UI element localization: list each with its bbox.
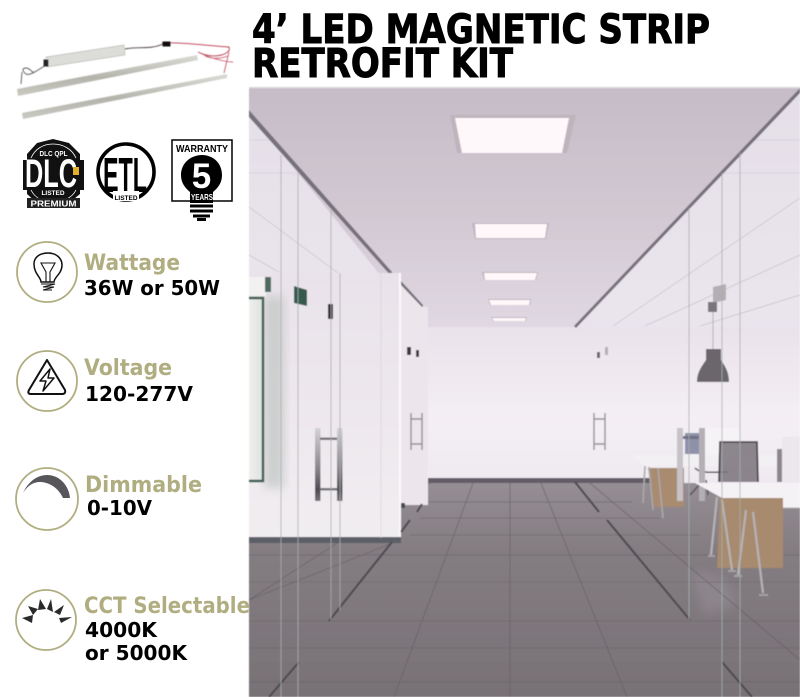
LED strip 1 (17, 55, 198, 96)
photo: ceiling (249, 88, 800, 327)
badge: DLC QPL listed premium: DLC QPL (40, 151, 68, 158)
driver box (46, 45, 125, 67)
photo: office chair (719, 442, 758, 482)
photo: small door handles (411, 413, 605, 450)
photo: second wall segment (401, 285, 428, 508)
title (252, 7, 710, 87)
photo: ceiling beams (249, 88, 800, 328)
badge: DLC QPL listed premium: LISTED (41, 190, 65, 197)
spec: dimmable (16, 468, 202, 530)
badge: ETL listed (98, 144, 154, 203)
badge: 5 year warranty: YEARS (191, 192, 213, 202)
photo: floor rails (269, 482, 752, 697)
badge: ETL listed: LISTED (114, 195, 138, 202)
icon: voltage triangle (17, 351, 77, 411)
office corridor photo (249, 87, 800, 697)
badge: 5 year warranty: 5 (192, 157, 211, 196)
photo: ceiling light panels (450, 115, 576, 321)
label: CCT selectable: CCT Selectable (84, 594, 250, 619)
title: RETROFIT KIT (252, 41, 514, 87)
value: wattage: 36W or 50W (84, 276, 220, 300)
photo: left foreground wall (249, 273, 401, 543)
badge: DLC QPL listed premium: DLC (25, 152, 77, 196)
icon: dimmer arc (16, 468, 78, 530)
value: CCT selectable: 4000K (85, 618, 158, 642)
photo: desk front (695, 483, 800, 595)
product image: LED strips and driver (17, 42, 233, 119)
spec: wattage (17, 242, 220, 302)
badge: ETL listed: ETL (103, 149, 147, 203)
photo: back wall (428, 327, 800, 479)
photo: desk back (632, 455, 777, 518)
label: wattage: Wattage (84, 251, 180, 276)
label: voltage: Voltage (84, 356, 172, 381)
photo: pendant lamp (697, 284, 729, 382)
spec: voltage (17, 351, 193, 411)
photo: back office panels and bin (683, 428, 800, 483)
badge: 5 year warranty (172, 140, 232, 220)
LED strip 2 (22, 74, 227, 119)
title: 4’ LED MAGNETIC STRIP (252, 7, 710, 53)
value: voltage: 120-277V (85, 382, 193, 406)
photo: large door handle (315, 428, 342, 501)
icon: sun rays (16, 590, 76, 650)
photo: glass partition posts (677, 428, 705, 501)
photo: glass panel edges (281, 153, 740, 697)
badge: 5 year warranty: WARRANTY (176, 144, 228, 155)
photo: projector screen (249, 277, 284, 488)
badge: DLC QPL listed premium (23, 139, 84, 208)
spec: CCT selectable (16, 590, 250, 665)
value: dimmable: 0-10V (87, 496, 152, 520)
wires (21, 42, 233, 84)
icon: light bulb (17, 242, 77, 302)
photo: back wall baseboard (428, 478, 650, 483)
photo: ceiling top edge (249, 87, 800, 88)
photo: side ceilings and upper walls (249, 88, 800, 488)
label: dimmable: Dimmable (85, 473, 202, 498)
spec: CCT selectable: or 5000K (85, 641, 188, 665)
badge: DLC QPL listed premium: PREMIUM (30, 198, 76, 208)
photo: floor (249, 483, 800, 697)
photo: door fittings (294, 286, 608, 358)
